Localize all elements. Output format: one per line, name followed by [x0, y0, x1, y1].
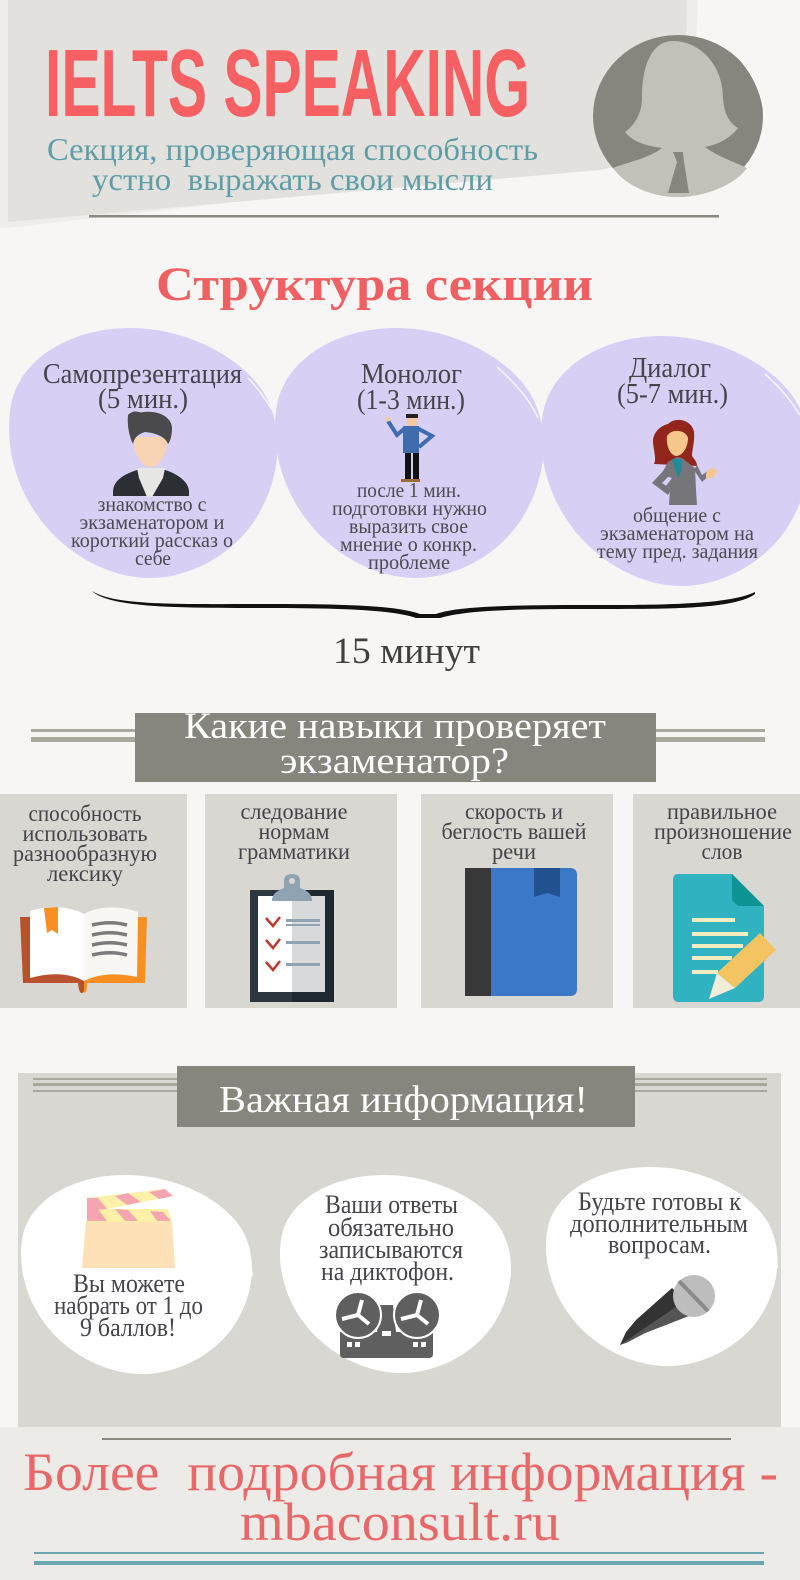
text: набрать от 1 до [54, 1291, 203, 1320]
description: экзаменатором на [600, 521, 755, 545]
heading: skills [31, 706, 765, 782]
text [54, 1269, 203, 1342]
panel: important information [18, 1066, 781, 1427]
text: грамматики [238, 839, 350, 864]
text: (1-3 мин.) [357, 385, 465, 416]
text: скорость и [465, 799, 563, 824]
panel: dialogue circle [541, 336, 800, 586]
icon: man [113, 411, 189, 497]
text: Самопрезентация [43, 359, 242, 390]
text [357, 359, 465, 416]
footer text: Более подробная информация - [23, 1442, 778, 1502]
description: проблеме [368, 550, 450, 574]
heading: Важная информация! [219, 1079, 588, 1121]
subtitle: Секция, проверяющая способность [47, 131, 538, 167]
text: речи [492, 839, 536, 864]
panel: pronunciation card [633, 794, 800, 1008]
text: записываются [319, 1235, 463, 1264]
text [617, 353, 728, 410]
panel: questions blob [546, 1167, 777, 1366]
footer text: mbaconsult.ru [240, 1492, 560, 1552]
text [13, 801, 157, 886]
description: экзаменатором и [80, 510, 224, 534]
icon: blue notebook [465, 868, 577, 996]
text: вопросам. [608, 1230, 711, 1259]
icon: woman [652, 420, 717, 505]
description: мнение о конкр. [340, 532, 477, 556]
panel: score blob [21, 1175, 252, 1374]
text: Будьте готовы к [578, 1187, 741, 1216]
icon: tape recorder [335, 1292, 440, 1358]
icon: document with pencil [673, 874, 776, 1002]
text: использовать [22, 821, 148, 846]
text: Ваши ответы [325, 1190, 458, 1219]
text: слов [702, 839, 743, 864]
text: обязательно [328, 1213, 454, 1242]
duration text: 15 минут [333, 631, 480, 672]
text: нормам [258, 819, 330, 844]
description: знакомство с [98, 492, 206, 516]
icon: clapperboard [82, 1189, 175, 1268]
description: выразить свое [349, 514, 468, 538]
text: беглость вашей [442, 819, 586, 844]
description [71, 492, 233, 570]
text [238, 799, 350, 864]
description: себе [135, 546, 171, 570]
text: разнообразную [13, 841, 157, 866]
text: Монолог [361, 359, 462, 390]
heading [33, 1066, 767, 1127]
panel: recorder blob [280, 1175, 511, 1373]
heading: skills: Какие навыки проверяет [184, 706, 606, 747]
text: лексику [47, 861, 123, 886]
heading: skills: экзаменатор? [280, 741, 509, 782]
description: общение с [633, 503, 721, 527]
description: короткий рассказ о [71, 528, 233, 552]
panel: monologue circle [275, 328, 544, 578]
description: тему пред. задания [597, 539, 758, 563]
text [442, 799, 586, 864]
text: Вы можете [73, 1269, 185, 1298]
subtitle [47, 131, 538, 197]
panel: header [0, 0, 765, 228]
text: дополнительным [570, 1209, 748, 1238]
icon: clipboard [250, 874, 334, 1002]
text [43, 359, 242, 415]
text: (5-7 мин.) [617, 379, 728, 410]
divider [89, 215, 719, 218]
text: правильное [667, 799, 777, 824]
icon: avatar [593, 35, 765, 197]
description: подготовки нужно [332, 496, 487, 520]
panel: footer [0, 1427, 800, 1580]
text [319, 1190, 463, 1286]
brace [92, 591, 755, 618]
text: способность [28, 801, 142, 826]
icon: microphone [620, 1275, 715, 1345]
text: (5 мин.) [98, 384, 188, 415]
panel: grammar card [205, 794, 397, 1008]
panel: vocabulary card [0, 794, 187, 1008]
icon: standing man [386, 414, 432, 482]
icon: open book [20, 907, 147, 993]
text: следование [240, 799, 348, 824]
text [570, 1187, 748, 1259]
panel: self-presentation circle [9, 328, 278, 578]
description [597, 503, 758, 563]
description: после 1 мин. [357, 478, 461, 502]
text: Диалог [629, 353, 711, 384]
text [654, 799, 792, 864]
subtitle: устно выражать свои мысли [92, 161, 493, 197]
text: произношение [654, 819, 792, 844]
text: на диктофон. [321, 1257, 454, 1286]
description [332, 478, 487, 574]
footer text [23, 1442, 778, 1552]
text: 9 баллов! [80, 1313, 176, 1342]
heading: structure: Структура секции [156, 258, 593, 311]
panel: fluency card [421, 794, 613, 1008]
